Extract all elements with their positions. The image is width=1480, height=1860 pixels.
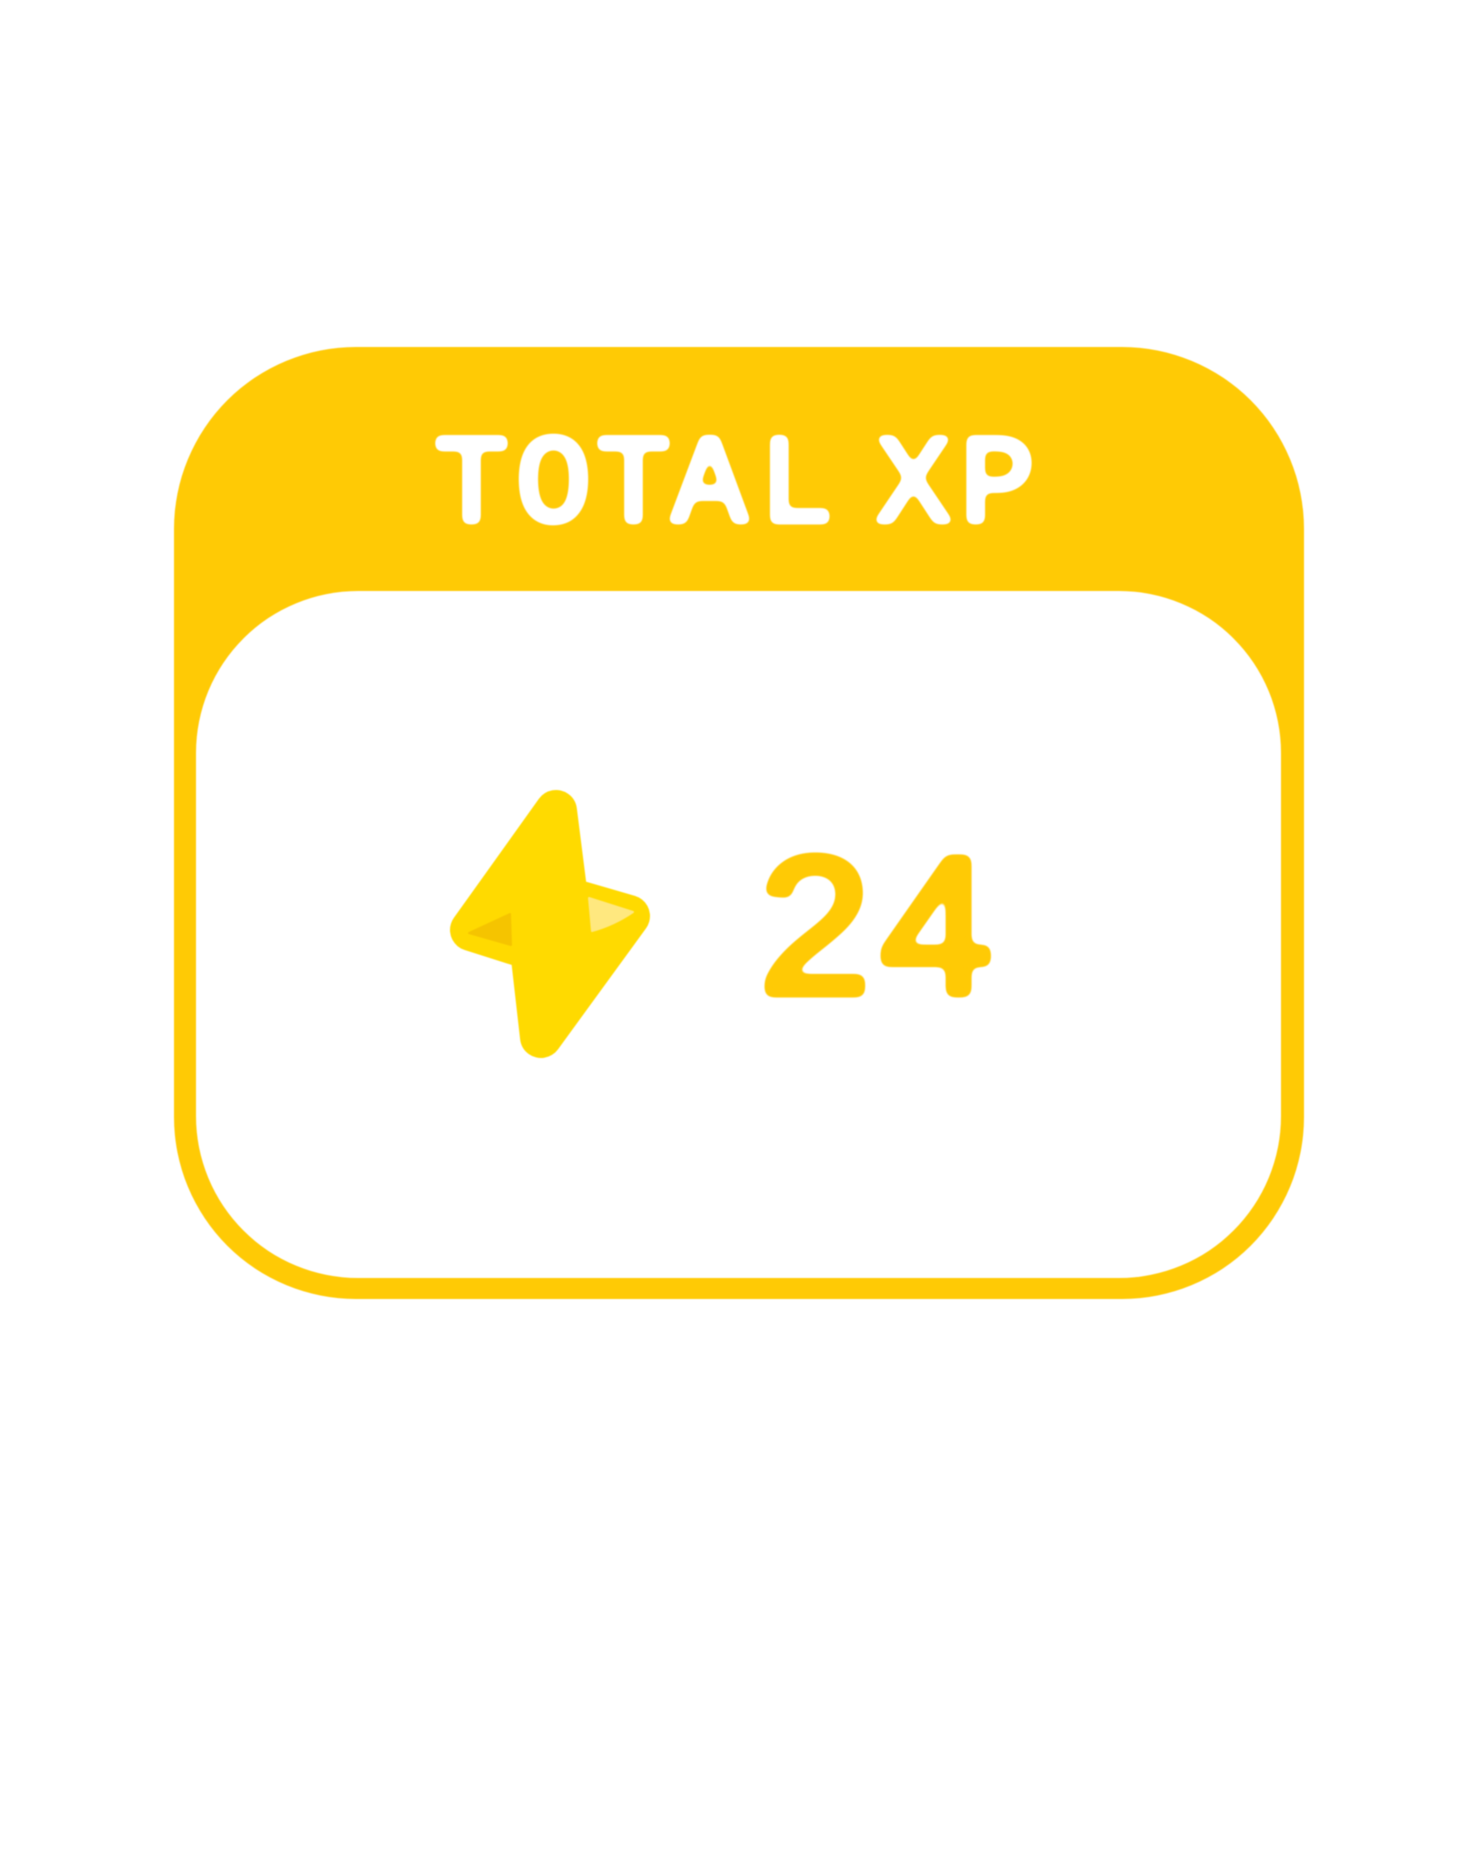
heading: TOTAL XP: TOTAL XP (434, 417, 1035, 559)
card frame (174, 347, 1304, 1299)
value: 24: 24 (759, 817, 992, 1034)
icon: lightning bolt (469, 811, 633, 1037)
card inner body (196, 591, 1281, 1278)
